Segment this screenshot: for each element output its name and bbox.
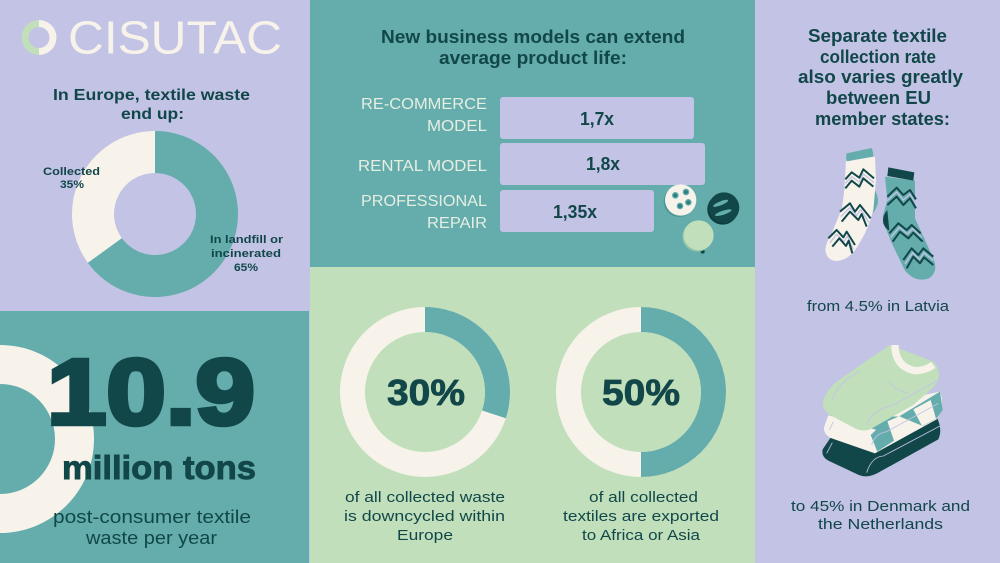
number: 10.9: 10.9 xyxy=(47,340,255,444)
panel: right background xyxy=(756,0,1000,563)
heading: business models xyxy=(381,27,685,68)
label: landfill xyxy=(210,234,284,274)
icon: buttons xyxy=(664,184,739,254)
label: landfill: incinerated xyxy=(211,248,281,260)
bar: re-commerce model: RE-COMMERCE xyxy=(361,96,487,113)
bar: professional repair: REPAIR xyxy=(427,215,487,232)
heading: collection rate: between EU xyxy=(826,88,931,108)
icon: stacked sweaters xyxy=(822,345,943,476)
bar chart: product life xyxy=(358,96,705,232)
donut chart: exported 50%: 50% xyxy=(602,372,680,413)
caption: downcycled xyxy=(344,489,505,544)
bar: rental model xyxy=(358,143,705,185)
heading: collection rate: member states: xyxy=(815,109,950,129)
heading: collection rate: also varies greatly xyxy=(798,67,963,87)
caption: exported: to Africa or Asia xyxy=(582,527,701,544)
panel: left top background xyxy=(0,0,309,311)
caption: Denmark and Netherlands xyxy=(791,498,970,533)
donut chart: exported 50% xyxy=(568,307,726,477)
heading: Europe textile waste: end up: xyxy=(121,106,184,123)
caption: post-consumer waste xyxy=(53,507,251,548)
bar: professional repair xyxy=(361,190,654,232)
segment: collected 35% xyxy=(72,131,155,263)
unit: million tons: million tons xyxy=(62,449,256,486)
caption: exported: of all collected xyxy=(589,489,698,506)
panel: center top background xyxy=(310,0,755,267)
donut chart: downcycled 30%: 30% xyxy=(387,372,465,413)
icon: socks xyxy=(825,148,935,280)
heading: collection rate: collection rate xyxy=(820,47,936,67)
caption: exported: textiles are exported xyxy=(563,508,719,525)
caption: Latvia: from 4.5% in Latvia xyxy=(807,298,950,315)
label: collected: Collected xyxy=(43,166,100,178)
caption: Denmark and Netherlands: the Netherlands xyxy=(818,516,943,533)
caption: post-consumer waste: post-consumer textile xyxy=(53,507,251,527)
decorative ring: large cream xyxy=(0,345,94,533)
stat: 10.9 million tons xyxy=(47,340,256,548)
heading: collection rate: Separate textile xyxy=(808,26,947,46)
label: collected xyxy=(43,166,100,191)
label: landfill: 65% xyxy=(234,262,258,274)
donut chart: waste destination xyxy=(43,131,284,297)
caption: exported xyxy=(563,489,719,544)
bar: professional repair: PROFESSIONAL xyxy=(361,193,487,210)
bar: professional repair: 1,35x xyxy=(553,202,597,222)
heading: collection rate xyxy=(798,26,963,129)
heading: Europe textile waste xyxy=(53,87,250,123)
heading: business models: average product life: xyxy=(439,48,627,68)
bar: re-commerce model: 1,7x xyxy=(580,109,614,129)
panel: center bottom background xyxy=(310,267,755,563)
donut chart: downcycled 30% xyxy=(352,307,510,464)
logo: CISUTAC xyxy=(22,12,282,64)
logo wordmark: CISUTAC xyxy=(68,12,282,64)
label: collected: 35% xyxy=(60,179,84,191)
panel: left bottom background xyxy=(0,311,309,563)
caption: downcycled: Europe xyxy=(397,527,453,544)
label: landfill: In landfill or xyxy=(210,234,284,246)
bar: re-commerce model xyxy=(361,96,694,139)
heading: Europe textile waste: In Europe, textile waste xyxy=(53,87,250,104)
bar: rental model: RENTAL MODEL xyxy=(358,158,487,175)
caption: downcycled: is downcycled within xyxy=(344,508,505,525)
bar: rental model: 1,8x xyxy=(586,154,620,174)
bar: re-commerce model: MODEL xyxy=(427,118,487,135)
caption: downcycled: of all collected waste xyxy=(345,489,505,506)
heading: business models: New business models can extend xyxy=(381,27,685,47)
caption: Denmark and Netherlands: to 45% in Denmark and xyxy=(791,498,970,515)
segment: landfill or incinerated 65% xyxy=(88,131,238,297)
icon: logo ring xyxy=(22,20,56,55)
caption: post-consumer waste: waste per year xyxy=(85,528,217,548)
